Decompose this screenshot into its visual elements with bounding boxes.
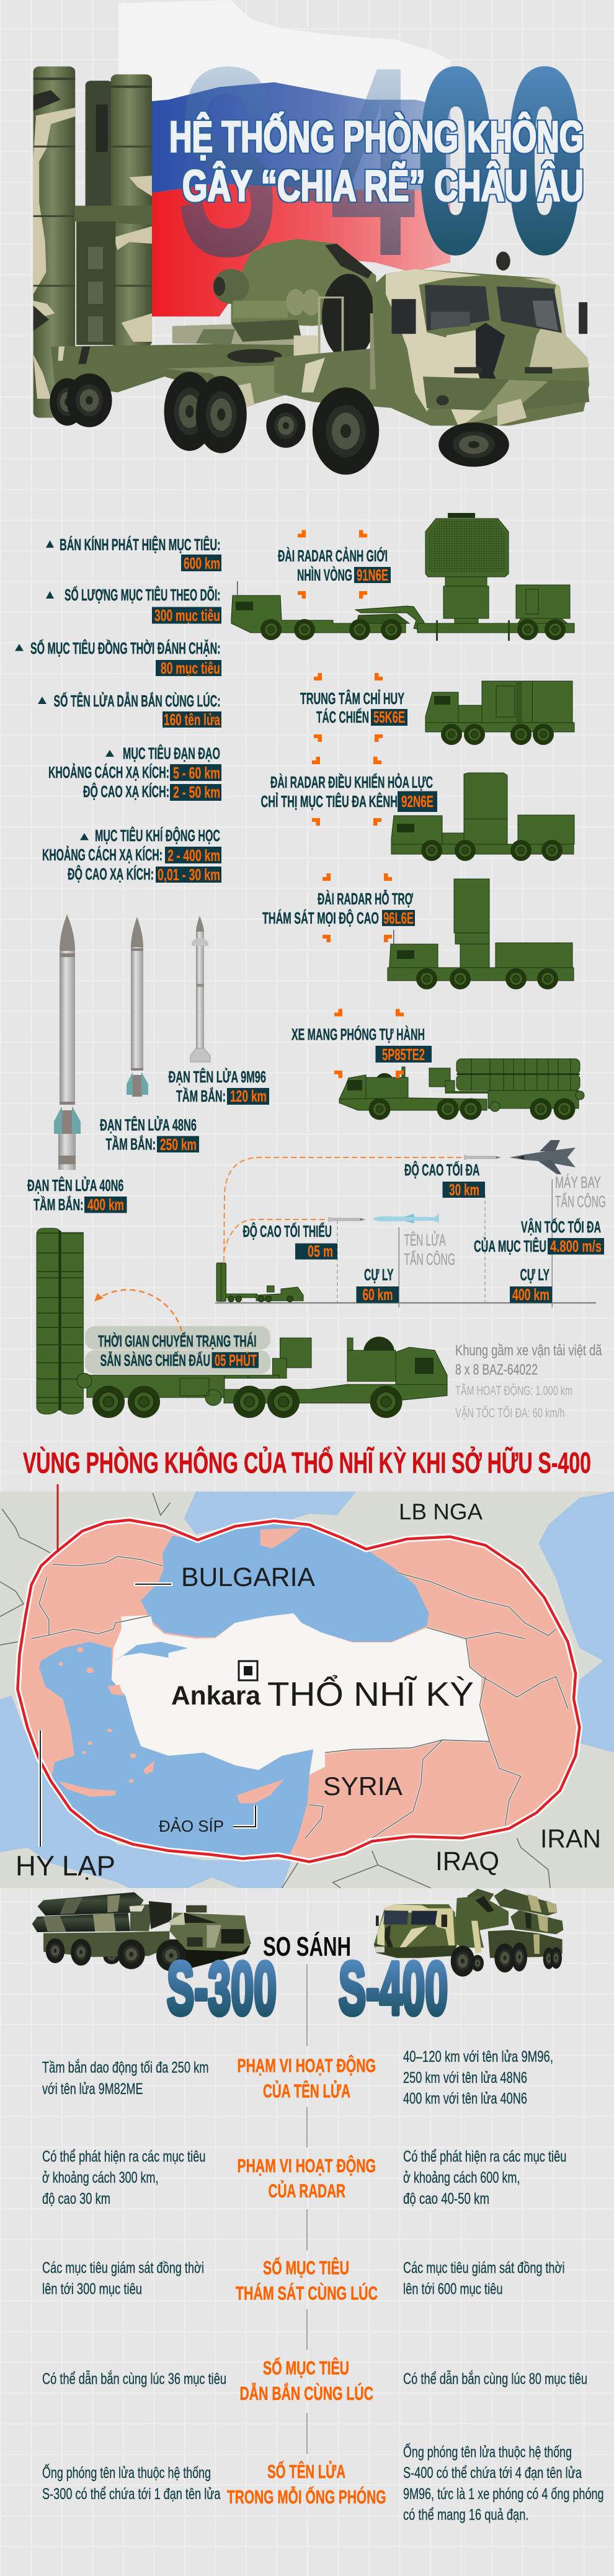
comparison row: radar range: Có thể phát hiện ra các mục tiêu xyxy=(42,2148,206,2165)
comparison row: missile range xyxy=(42,2048,553,2108)
comparison row: missiles per tube: SỐ TÊN LỬA xyxy=(267,2460,345,2482)
comparison row: missile range: Tầm bắn dao động tối đa 250 km xyxy=(42,2058,208,2077)
map shapes xyxy=(0,1492,614,1888)
callout line: Cyprus xyxy=(233,1806,256,1827)
missile 9M96 xyxy=(190,916,210,1062)
label: 5P85TE2 launcher: 5P85TE2 xyxy=(382,1045,425,1064)
comparison row: missile range: PHẠM VI HOẠT ĐỘNG xyxy=(237,2054,376,2077)
label: transition time: 05 PHÚT xyxy=(215,1351,257,1370)
label: 91N6E radar xyxy=(278,530,391,599)
comparison row: tracked targets: Các mục tiêu giám sát đồng thời xyxy=(42,2259,204,2276)
comparison row: guided targets: DẪN BẮN CÙNG LÚC xyxy=(239,2382,373,2404)
comparison row: missiles per tube: TRONG MỖI ỐNG PHÓNG xyxy=(227,2485,386,2508)
front wheels xyxy=(313,387,509,475)
labels: ĐỘ CAO TỐI THIỂU xyxy=(243,1222,332,1241)
spec: ballistic targets: ĐỘ CAO XẠ KÍCH: xyxy=(83,782,169,801)
comparison row: tracked targets: THÁM SÁT CÙNG LÚC xyxy=(236,2281,378,2304)
icon: fighter jet xyxy=(509,1140,576,1174)
missile labels: ĐẠN TÊN LỬA 48N6 xyxy=(100,1115,197,1134)
trailer deck xyxy=(51,323,305,408)
missile labels: 250 km xyxy=(160,1135,197,1154)
raised missile tubes xyxy=(37,1228,83,1414)
spec: detection radius xyxy=(46,535,221,573)
center divider xyxy=(306,1964,308,2454)
label: transition time: SẴN SÀNG CHIẾN ĐẤU xyxy=(100,1351,210,1370)
missile labels xyxy=(27,1067,269,1214)
comparison row: radar range: CỦA RADAR xyxy=(268,2180,345,2202)
S-400 title: S-400 xyxy=(339,1947,448,2030)
comparison row: radar range xyxy=(42,2148,567,2208)
spec: aerodynamic targets: ĐỘ CAO XẠ KÍCH: xyxy=(68,865,154,883)
spec: aerodynamic targets: 2 - 400 km xyxy=(167,846,220,865)
label: 91N6E radar: NHÌN VÒNG xyxy=(297,566,352,584)
crane assembly xyxy=(213,239,378,380)
label: 96L6E radar xyxy=(262,873,415,942)
trailer xyxy=(77,1338,311,1406)
label: transition time xyxy=(98,1332,259,1370)
label: 92N6E radar: ĐÀI RADAR ĐIỀU KHIỂN HỎA LỰC xyxy=(270,772,433,791)
spec: engaged targets: 80 mục tiêu xyxy=(161,659,220,677)
label: 91N6E radar: 91N6E xyxy=(357,566,388,584)
comparison row: tracked targets: SỐ MỤC TIÊU xyxy=(263,2257,349,2279)
labels: TẤN CÔNG xyxy=(404,1250,455,1268)
lattice frame xyxy=(74,206,152,345)
map labels xyxy=(16,1499,601,1882)
comparison row: missiles per tube: có thể mang 16 quả đạn. xyxy=(403,2506,528,2523)
comparison row: guided targets: SỐ MỤC TIÊU xyxy=(263,2356,349,2379)
command vehicle 55K6E xyxy=(425,681,574,745)
missile labels: 120 km xyxy=(230,1087,267,1105)
chassis notes: VẬN TỐC TỐI ĐA: 60 km/h xyxy=(455,1406,564,1420)
icon: Ankara capital marker xyxy=(238,1660,259,1682)
labels: CỰ LY xyxy=(520,1265,549,1284)
label: 92N6E radar: 92N6E xyxy=(401,792,434,811)
spec: guided missiles: 160 tên lửa xyxy=(164,710,220,729)
truck cab xyxy=(372,252,589,426)
engagement envelope diagram xyxy=(215,1140,606,1308)
spec: ballistic targets: MỤC TIÊU ĐẠN ĐẠO xyxy=(123,744,220,763)
trailer and rear wheels xyxy=(50,372,305,453)
label: 5P85TE2 launcher: XE MANG PHÓNG TỰ HÀNH xyxy=(291,1025,425,1043)
labels: 05 m xyxy=(308,1242,333,1260)
mini launcher xyxy=(216,1263,303,1303)
radar vehicle 92N6E xyxy=(391,773,574,861)
comparison row: radar range: độ cao 40-50 km xyxy=(403,2190,489,2208)
comparison row: guided targets: Có thể dẫn bắn cùng lúc 36 mục tiêu xyxy=(42,2369,226,2388)
flag of Russia xyxy=(118,0,450,316)
S-400 launcher photo illustration xyxy=(374,1889,563,1977)
spec: tracked targets: SỐ LƯỢNG MỤC TIÊU THEO DÕI: xyxy=(65,586,221,604)
radar vehicle 96L6E xyxy=(388,879,574,989)
comparison row: missile range: 40–120 km với tên lửa 9M96, xyxy=(403,2048,553,2066)
icon: cruise missile xyxy=(372,1214,439,1223)
map labels: Ankara xyxy=(171,1681,261,1711)
spec: detection radius: 600 km xyxy=(184,554,220,573)
comparison heading: SO SÁNH xyxy=(263,1931,351,1962)
S-300 title: S-300 xyxy=(167,1947,277,2030)
missile labels: ĐẠN TÊN LỬA 9M96 xyxy=(169,1067,266,1086)
comparison row: missile range: 400 km với tên lửa 40N6 xyxy=(403,2090,527,2108)
spec: ballistic targets: KHOẢNG CÁCH XẠ KÍCH: xyxy=(48,763,169,782)
map labels: LB NGA xyxy=(399,1499,483,1525)
chassis notes xyxy=(455,1342,602,1420)
map labels: HY LẠP xyxy=(16,1850,115,1882)
comparison row: missiles per tube xyxy=(42,2443,604,2523)
spec: ballistic targets: 5 - 60 km xyxy=(173,764,220,782)
comparison row: missiles per tube: S-300 có thể chứa tới 1 đạn tên lửa xyxy=(42,2485,221,2503)
big launcher truck raised xyxy=(37,1228,602,1420)
spec: aerodynamic targets: MỤC TIÊU KHÍ ĐỘNG HỌC xyxy=(95,826,220,845)
label: 91N6E radar: ĐÀI RADAR CẢNH GIỚI xyxy=(278,546,388,565)
label: 5P85TE2 launcher xyxy=(291,1009,432,1078)
label: 55K6E command post: TÁC CHIẾN xyxy=(316,708,369,726)
dashed arrow: transition xyxy=(94,1290,182,1331)
comparison row: missile range: với tên lửa 9M82ME xyxy=(42,2080,143,2098)
map labels: ĐẢO SÍP xyxy=(159,1817,224,1835)
label: 96L6E radar: 96L6E xyxy=(383,909,414,927)
spec: engaged targets xyxy=(15,639,221,677)
map labels: BULGARIA xyxy=(181,1562,315,1592)
label: transition time: THỜI GIAN CHUYỂN TRẠNG THÁI xyxy=(98,1332,257,1350)
labels: TÊN LỬA xyxy=(404,1230,446,1249)
spec: aerodynamic targets xyxy=(42,826,221,884)
label: 55K6E command post xyxy=(300,673,407,742)
faded missile canisters xyxy=(85,1326,270,1374)
big S-400 lettering: 0 xyxy=(419,22,493,299)
comparison row: radar range: PHẠM VI HOẠT ĐỘNG xyxy=(237,2154,376,2177)
map labels: SYRIA xyxy=(323,1772,403,1801)
map labels: IRAQ xyxy=(435,1847,499,1876)
callout line: Bulgaria xyxy=(134,1582,172,1586)
missile labels: TẦM BẮN: xyxy=(105,1135,156,1154)
comparison row: missile range: 250 km với tên lửa 48N6 xyxy=(403,2069,527,2087)
label: 96L6E radar: THÁM SÁT MỌI ĐỘ CAO xyxy=(262,909,379,927)
title xyxy=(169,112,584,211)
guide lines xyxy=(337,1179,553,1308)
missile tubes xyxy=(33,66,152,417)
labels xyxy=(243,1161,606,1304)
missile 40N6 xyxy=(54,914,81,1170)
map labels: THỔ NHĨ KỲ xyxy=(267,1675,474,1713)
spec: ballistic targets xyxy=(48,744,221,801)
spec: aerodynamic targets: 0,01 - 30 km xyxy=(158,865,220,884)
truck wheels xyxy=(92,1386,402,1418)
truck chassis xyxy=(274,313,396,408)
missile 48N6 xyxy=(127,917,148,1097)
map labels: IRAN xyxy=(540,1824,601,1853)
S-300 launcher photo illustration xyxy=(32,1892,251,1971)
comparison row: radar range: ở khoảng cách 300 km, xyxy=(42,2169,159,2186)
interceptor missile high xyxy=(464,1155,501,1160)
labels: 400 km xyxy=(512,1285,549,1304)
label: 96L6E radar: ĐÀI RADAR HỖ TRỢ xyxy=(318,889,413,908)
spec: tracked targets xyxy=(46,586,221,625)
spec: engaged targets: SỐ MỤC TIÊU ĐỒNG THỜI ĐÁNH CHẶN: xyxy=(30,639,221,657)
spec: detection radius: BÁN KÍNH PHÁT HIỆN MỤC TIÊU: xyxy=(60,535,221,554)
labels: 60 km xyxy=(362,1285,393,1304)
spec: guided missiles: SỐ TÊN LỬA DẪN BẮN CÙNG LÚC: xyxy=(53,691,221,710)
trajectory paths xyxy=(224,1157,462,1262)
labels: ĐỘ CAO TỐI ĐA xyxy=(404,1161,480,1179)
spec: guided missiles xyxy=(38,691,221,729)
missile labels: TẦM BẮN: xyxy=(33,1195,83,1214)
labels: 30 km xyxy=(449,1180,479,1199)
callout line: Greece xyxy=(38,1731,42,1847)
spec: tracked targets: 300 mục tiêu xyxy=(154,606,220,625)
label: 55K6E command post: TRUNG TÂM CHỈ HUY xyxy=(300,689,404,708)
comparison row: radar range: độ cao 30 km xyxy=(42,2190,110,2208)
launcher vehicle 5P85TE2 xyxy=(339,1059,584,1120)
ground line xyxy=(215,1303,596,1304)
label: 55K6E command post: 55K6E xyxy=(373,708,405,726)
panel: specification list xyxy=(15,535,221,884)
missile labels: TẦM BẮN: xyxy=(176,1087,226,1105)
missile labels: 400 km xyxy=(87,1195,124,1214)
interceptor missile low xyxy=(328,1217,365,1222)
comparison row: missiles per tube: Ống phóng tên lửa thuộc hệ thống xyxy=(42,2463,211,2482)
comparison row: missile range: CỦA TÊN LỬA xyxy=(263,2079,350,2101)
chassis notes: 8 x 8 BAZ-64022 xyxy=(455,1362,538,1378)
tractor cab xyxy=(224,1337,447,1403)
labels: CỦA MỤC TIÊU xyxy=(474,1236,546,1255)
radar vehicle 91N6E xyxy=(231,513,574,641)
comparison row: radar range: ở khoảng cách 600 km, xyxy=(403,2169,520,2186)
comparison row: guided targets xyxy=(42,2356,587,2404)
spec: aerodynamic targets: KHOẢNG CÁCH XẠ KÍCH: xyxy=(42,845,162,864)
comparison row: tracked targets: lên tới 600 mục tiêu xyxy=(403,2280,502,2297)
missile labels: ĐẠN TÊN LỬA 40N6 xyxy=(27,1175,124,1195)
comparison row: tracked targets xyxy=(42,2257,564,2304)
labels: CỰ LY xyxy=(364,1265,393,1284)
spec: ballistic targets: 2 - 50 km xyxy=(173,783,220,801)
S-400 launcher truck illustration xyxy=(33,66,589,475)
label: 92N6E radar xyxy=(260,757,437,826)
comparison row: tracked targets: lên tới 300 mục tiêu xyxy=(42,2280,142,2297)
big S-400 lettering: S-4 xyxy=(176,11,417,313)
callout line: air defence zone xyxy=(57,1484,58,1551)
label: 92N6E radar: CHỈ THỊ MỤC TIÊU ĐA KÊNH xyxy=(260,792,398,811)
map: Turkey air defence zone xyxy=(0,1484,614,1888)
